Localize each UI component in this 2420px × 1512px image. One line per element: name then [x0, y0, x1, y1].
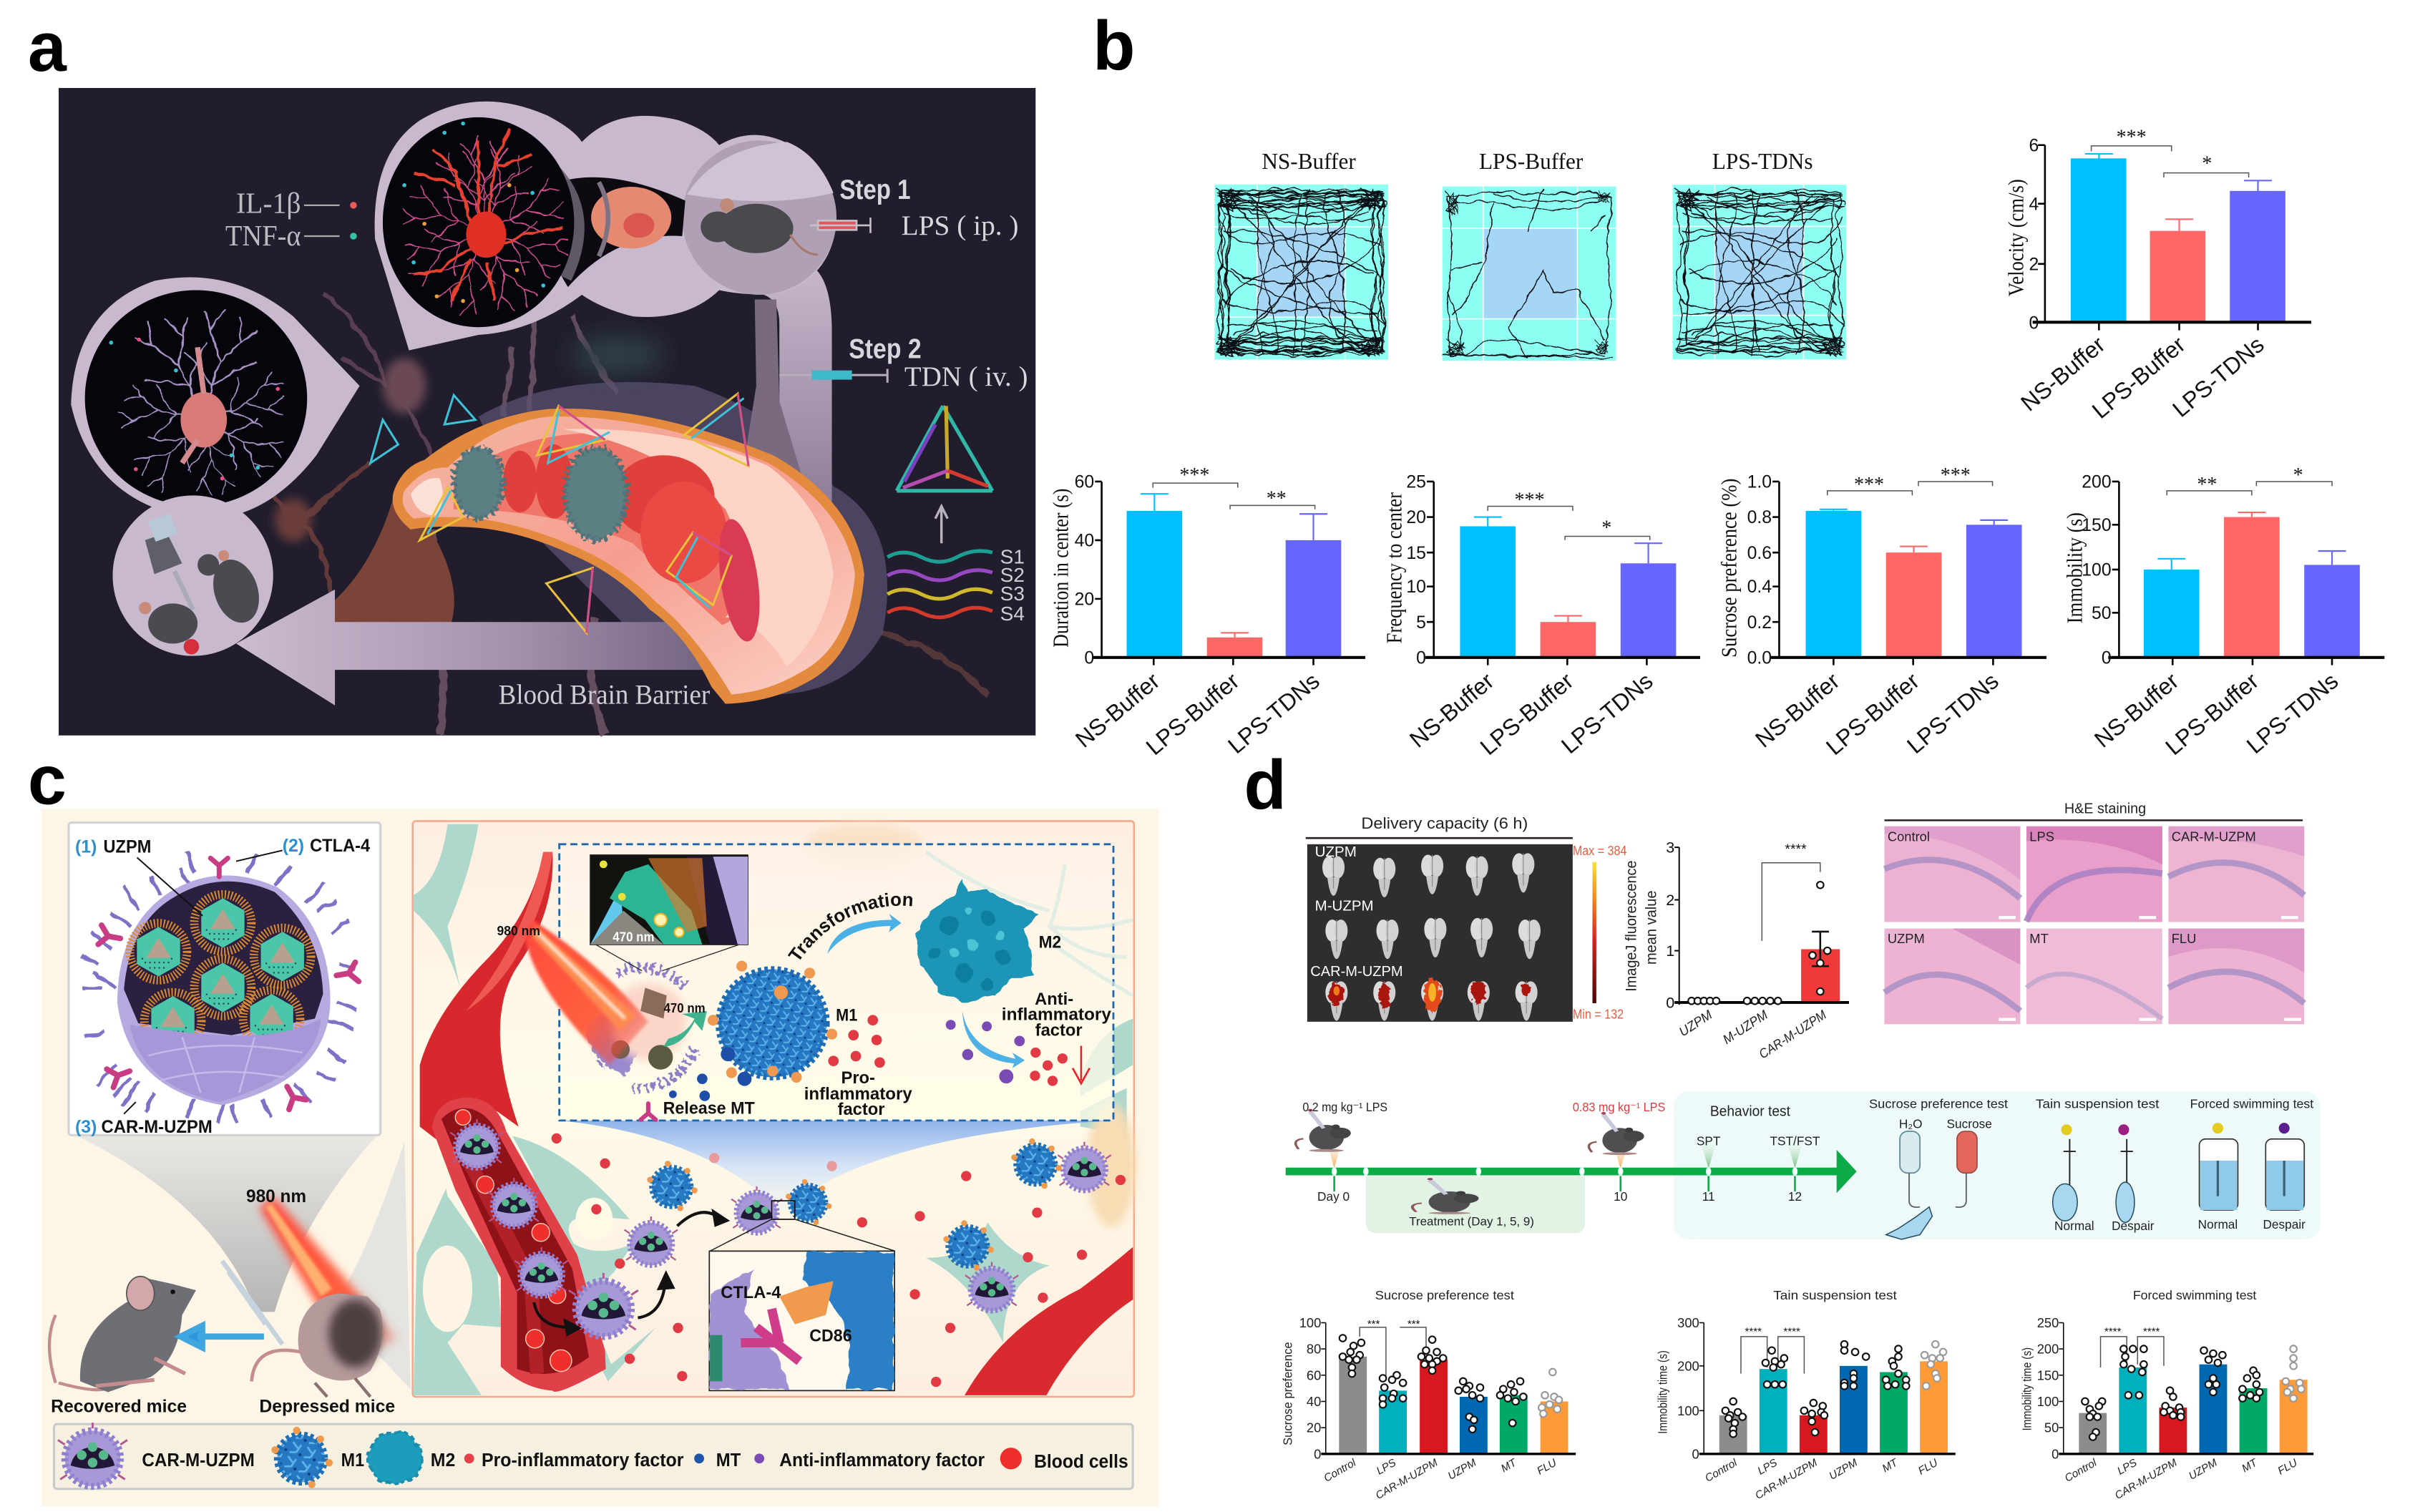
red factor dots: [552, 1133, 1126, 1387]
vessel stem: [301, 486, 454, 625]
chart: forced swimming test: FLU: [2275, 1457, 2300, 1478]
timeline and test illustrations: [1286, 1097, 2313, 1239]
H&E tile CAR-M-UZPM: [2168, 826, 2304, 922]
panel b: open field tracks: [1214, 149, 1846, 361]
timeline: 11: [1702, 1189, 1715, 1204]
chart: ImageJ fluorescence: UZPM: [1676, 1007, 1715, 1039]
chart: velocity: 6: [2029, 136, 2039, 155]
chart: duration in center: 60: [1075, 473, 1094, 492]
forced swimming illustration: [2190, 1097, 2313, 1231]
CAR particle in box: [583, 967, 707, 1120]
selection box: [771, 1201, 795, 1219]
treatment panel background: [1366, 1176, 1585, 1233]
strand labels: S1: [1000, 545, 1025, 567]
chart: ImageJ fluorescence: M-UZPM: [1720, 1007, 1771, 1047]
chart: sucrose preference test: UZPM: [1446, 1456, 1479, 1483]
chart: forced swimming test: MT: [2240, 1456, 2260, 1475]
teardrop top: [375, 102, 836, 351]
Pro-inflammatory label: factor: [838, 1101, 884, 1119]
Pro-inflammatory label: inflammatory: [804, 1086, 913, 1104]
chart: ImageJ fluorescence: 3: [1666, 839, 1674, 857]
chart: forced swimming test: 250: [2037, 1315, 2059, 1330]
big DNA tetrahedron: [897, 406, 992, 491]
chart: forced swimming test: UZPM: [2187, 1456, 2220, 1483]
chart: immobility: 150: [2082, 516, 2112, 535]
LPS dose 1: 0.2 mg kg⁻¹ LPS: [1302, 1100, 1387, 1114]
chart: velocity: *: [2202, 152, 2212, 175]
chart: sucrose preference: LPS-TDNs: [1902, 668, 2004, 759]
label 2: (2): [283, 837, 304, 856]
tail suspension illustration: Despair: [2112, 1219, 2155, 1233]
chart: frequency to center: 25: [1406, 473, 1426, 492]
chart: ImageJ fluorescence: ImageJ fluorescence: [1621, 860, 1639, 992]
chart: tail suspension test: Control: [1703, 1456, 1740, 1485]
chart: velocity: LPS-Buffer: [2087, 331, 2190, 424]
Anti-inflammatory label: [1002, 990, 1112, 1040]
membrane spikes: [80, 852, 358, 1123]
arena LPS-Buffer: [1443, 149, 1616, 361]
funnel right: [331, 1142, 411, 1389]
mouse circle: [112, 495, 273, 656]
panel label b: b: [1093, 6, 1135, 84]
blood cells in vessel: [455, 1110, 572, 1372]
chart: sucrose preference: NS-Buffer: [1750, 668, 1845, 753]
chart: sucrose preference test: Sucrose preference: [1280, 1342, 1294, 1445]
legend bar: [54, 1423, 1133, 1489]
label 3: (3): [75, 1118, 97, 1137]
chart: sucrose preference test: 0: [1314, 1446, 1321, 1461]
chart: sucrose preference: LPS-Buffer: [1821, 668, 1924, 760]
chart: sucrose preference: ***: [1854, 474, 1884, 496]
chart: velocity: ***: [2117, 127, 2147, 149]
CAR-M-UZPM label: CAR-M-UZPM: [101, 1118, 213, 1137]
chart: ImageJ fluorescence: mean value: [1641, 891, 1659, 965]
chart: sucrose preference test: MT: [1499, 1456, 1520, 1475]
arena NS-Buffer: NS-Buffer: [1262, 149, 1356, 174]
large panel background: [412, 820, 1141, 1398]
forced swimming illustration: Forced swimming test: [2190, 1097, 2313, 1111]
chart: immobility: NS-Buffer: [2089, 668, 2184, 753]
chart: duration in center: 20: [1075, 590, 1094, 610]
labels IL-1beta TNF-alpha: TNF-α: [225, 219, 301, 252]
chart: tail suspension test: 300: [1677, 1315, 1699, 1330]
chart: forced swimming test: LPS: [2115, 1457, 2139, 1478]
chart: duration in center: 0: [1084, 648, 1094, 668]
timeline: Day 0: [1317, 1189, 1350, 1204]
H&E tile MT: [2026, 929, 2162, 1024]
big arrow: [236, 590, 726, 706]
Pro-inflammatory label: [804, 1069, 913, 1119]
neuron circle left: [85, 290, 307, 506]
faded factor dots: [709, 1153, 837, 1171]
sucrose test illustration: Sucrose preference test: [1869, 1097, 2008, 1111]
step 1 label: Step 1: [839, 175, 911, 205]
chart: forced swimming test: [2019, 1288, 2313, 1502]
TDN label: TDN ( iv. ): [904, 361, 1028, 392]
H&E staining panel: [1885, 801, 2304, 1024]
chart: forced swimming test: Control: [2063, 1456, 2099, 1485]
chart: frequency to center: [1382, 473, 1700, 760]
legend bar: Pro-inflammatory factor: [482, 1450, 684, 1470]
chart: tail suspension test: 0: [1692, 1446, 1699, 1461]
chart: tail suspension test: FLU: [1916, 1457, 1940, 1478]
labels IL-1beta TNF-alpha: [225, 187, 357, 252]
Anti-inflammatory label: Anti-: [1035, 990, 1073, 1009]
strands S1-S4: [887, 551, 992, 618]
chart: forced swimming test: 0: [2051, 1446, 2059, 1461]
980 nm small: 980 nm: [497, 923, 540, 938]
H&E tile control: [1885, 826, 2020, 922]
chart: tail suspension test: MT: [1880, 1456, 1901, 1475]
legend bar: M1: [341, 1450, 364, 1470]
chart: frequency to center: Frequency to center: [1382, 492, 1406, 643]
legend bar: CAR-M-UZPM: [142, 1450, 255, 1470]
legend bar: Anti-inflammatory factor: [779, 1450, 985, 1470]
tail suspension illustration: Tain suspension test: [2036, 1097, 2160, 1111]
zoom lines CTLA: [710, 1219, 895, 1251]
chart: immobility: 50: [2092, 604, 2112, 623]
panel label d: d: [1244, 746, 1287, 824]
recovered mouse: [49, 1277, 196, 1392]
chart: sucrose preference: 0.4: [1747, 577, 1772, 597]
sucrose test illustration: [1869, 1097, 2008, 1239]
timeline: 12: [1788, 1189, 1802, 1204]
chart: sucrose preference test: 80: [1307, 1342, 1321, 1357]
chart: velocity: [2004, 127, 2311, 424]
chart: frequency to center: 10: [1406, 577, 1426, 597]
chart: tail suspension test: ****: [1783, 1326, 1800, 1338]
strand labels: S3: [1000, 582, 1025, 605]
chart: sucrose preference test: Sucrose preference test: [1375, 1288, 1514, 1302]
CTLA-4 label: CTLA-4: [310, 837, 370, 856]
mouse day 0: [1296, 1109, 1351, 1152]
chart: immobility: 0: [2102, 648, 2112, 668]
LPS label: LPS ( ip. ): [902, 210, 1019, 241]
chart: sucrose preference: 0.2: [1747, 613, 1772, 633]
delivery capacity imaging: CAR-M-UZPM: [1310, 963, 1403, 980]
delivery capacity imaging: Delivery capacity (6 h): [1361, 814, 1528, 832]
arrow heads: [563, 1209, 730, 1337]
H&E tile CAR-M-UZPM: CAR-M-UZPM: [2172, 829, 2256, 844]
chart: forced swimming test: 200: [2037, 1342, 2059, 1357]
forced swimming illustration: Despair: [2263, 1217, 2306, 1231]
chart: tail suspension test: UZPM: [1827, 1456, 1860, 1483]
blue arrow: [180, 1326, 264, 1347]
LPS dose 2: 0.83 mg kg⁻¹ LPS: [1573, 1100, 1665, 1114]
strand labels: S2: [1000, 564, 1025, 586]
pro-inflammatory dots: [828, 1015, 885, 1068]
red blood cells: [503, 444, 766, 644]
chart: ImageJ fluorescence: CAR-M-UZPM: [1756, 1007, 1829, 1061]
chart: duration in center: NS-Buffer: [1070, 668, 1165, 753]
faint astrocytes inside box: [926, 852, 1133, 995]
chart: frequency to center: LPS-TDNs: [1556, 668, 1658, 759]
chart: sucrose preference test: 60: [1307, 1367, 1321, 1382]
SPT label: SPT: [1697, 1133, 1721, 1148]
chart: frequency to center: NS-Buffer: [1405, 668, 1499, 753]
tetrahedra: [371, 394, 748, 633]
panel a: TDN mechanism illustration: [59, 88, 1035, 736]
mouse treatment: [1413, 1178, 1479, 1214]
legend bar: MT: [716, 1450, 741, 1470]
timeline: 10: [1614, 1189, 1627, 1204]
Anti-inflammatory label: inflammatory: [1002, 1006, 1112, 1025]
forced swimming illustration: Normal: [2198, 1217, 2238, 1231]
chart: sucrose preference: [1717, 464, 2046, 760]
Release MT label: Release MT: [663, 1100, 755, 1118]
blue curved arrow: [962, 1011, 1025, 1068]
chart: frequency to center: 20: [1406, 508, 1426, 527]
chart: immobility: *: [2293, 464, 2303, 487]
chart: frequency to center: LPS-Buffer: [1475, 668, 1579, 760]
H&E tile FLU: [2168, 929, 2304, 1024]
arena LPS-TDNs: LPS-TDNs: [1712, 149, 1813, 174]
chart: immobility: LPS-TDNs: [2242, 668, 2343, 759]
CTLA-4 CD86 inset: [709, 1251, 894, 1390]
chart: velocity: LPS-TDNs: [2167, 331, 2269, 422]
mouse step 1: [701, 198, 870, 255]
chart: frequency to center: 0: [1416, 648, 1426, 668]
H&E tile FLU: FLU: [2172, 931, 2196, 946]
left teardrop: [71, 278, 360, 519]
chart: duration in center: ***: [1179, 464, 1209, 487]
red vessel right: [965, 1247, 1133, 1395]
H&E tile UZPM: UZPM: [1888, 931, 1925, 946]
chart: tail suspension test: 100: [1677, 1403, 1699, 1418]
CAR particles: [450, 1119, 1111, 1337]
upper vessel: [420, 852, 552, 1142]
panel label c: c: [28, 741, 67, 819]
faint tan neuron top: [806, 824, 923, 867]
chart: frequency to center: ***: [1514, 489, 1544, 511]
timeline: [1286, 1138, 1857, 1204]
arena NS-Buffer: [1214, 149, 1388, 360]
chart: ImageJ fluorescence: 0: [1666, 993, 1674, 1011]
chart: immobility: 100: [2082, 561, 2112, 580]
delivery capacity imaging: UZPM: [1315, 844, 1357, 860]
lower vessel tube: [432, 1098, 606, 1392]
mouse day 10: [1589, 1112, 1644, 1155]
chart: velocity: Velocity (cm/s): [2004, 179, 2029, 296]
syringe step 2: [779, 369, 887, 383]
chart: forced swimming test: ****: [2104, 1326, 2122, 1338]
chart: forced swimming test: Immobility time (s): [2019, 1347, 2034, 1430]
chart: sucrose preference test: 100: [1299, 1315, 1321, 1330]
chart: frequency to center: 5: [1416, 613, 1426, 633]
chart: tail suspension test: Tain suspension test: [1773, 1288, 1897, 1302]
step 2 label: Step 2: [849, 333, 922, 364]
strand labels: [1000, 545, 1025, 625]
chart: forced swimming test: 50: [2044, 1420, 2059, 1435]
mini inset: [590, 855, 748, 945]
chart: sucrose preference test: ***: [1367, 1318, 1380, 1330]
chart: ImageJ fluorescence: 2: [1666, 891, 1674, 909]
up arrow: [935, 506, 947, 543]
UZPM label: UZPM: [104, 838, 151, 857]
zoom lines: [596, 945, 739, 971]
upper right lighter disc: [682, 140, 836, 295]
chart: forced swimming test: 150: [2037, 1367, 2059, 1382]
470 nm particle: 470 nm: [663, 1000, 706, 1015]
TST/FST label: TST/FST: [1770, 1133, 1820, 1148]
chart: forced swimming test: Forced swimming test: [2133, 1288, 2257, 1302]
inset particle: [69, 823, 381, 1135]
chart: sucrose preference: 0.0: [1747, 648, 1772, 668]
depressed mouse: [252, 1293, 383, 1397]
blood vessel cross-section: [393, 409, 864, 704]
black curved arrows: [534, 1212, 719, 1327]
chart: tail suspension test: [1655, 1288, 1956, 1502]
behavior test label: Behavior test: [1710, 1103, 1790, 1119]
delivery capacity imaging: Max = 384: [1573, 843, 1626, 858]
tail suspension illustration: [2036, 1097, 2160, 1233]
H&E tile control: Control: [1888, 829, 1930, 844]
chart: tail suspension test: LPS: [1756, 1457, 1780, 1478]
Pro-inflammatory label: Pro-: [841, 1069, 875, 1088]
CD86 inset label: CD86: [809, 1327, 852, 1345]
Transformation curved text: Transformation: [787, 893, 912, 960]
red down arrow: [1073, 1046, 1090, 1083]
dashed box: [560, 844, 1113, 1121]
chart: sucrose preference test: LPS: [1375, 1457, 1398, 1478]
label 1: (1): [75, 838, 97, 857]
chart: forced swimming test: ****: [2143, 1326, 2160, 1338]
chart: ImageJ fluorescence: 1: [1666, 942, 1674, 960]
M1 in box: [708, 961, 837, 1083]
chart: sucrose preference: Sucrose preference (%): [1717, 479, 1741, 658]
980 nm label: 980 nm: [246, 1187, 306, 1206]
Recovered mice label: Recovered mice: [51, 1398, 187, 1417]
H&E staining panel: H&E staining: [2064, 801, 2146, 817]
chart: velocity: NS-Buffer: [2016, 331, 2110, 416]
Blood Brain Barrier label: Blood Brain Barrier: [499, 680, 710, 711]
chart: sucrose preference: ***: [1941, 464, 1971, 487]
chart: velocity: 0: [2029, 313, 2039, 333]
chart: sucrose preference test: [1280, 1288, 1576, 1502]
Anti-inflammatory label: factor: [1035, 1021, 1083, 1040]
chart: immobility: Immobility (s): [2063, 512, 2087, 623]
vertical pipe: [753, 260, 832, 509]
chart: tail suspension test: ****: [1745, 1326, 1762, 1338]
neuron circle top: [383, 117, 575, 327]
chart: tail suspension test: Immobility time (s): [1655, 1350, 1669, 1434]
chart: sucrose preference: 0.8: [1747, 508, 1772, 527]
chart: duration in center: LPS-Buffer: [1141, 668, 1244, 760]
labels IL-1beta TNF-alpha: IL-1β: [236, 187, 301, 220]
delivery capacity imaging: M-UZPM: [1315, 898, 1374, 914]
chart: tail suspension test: CAR-M-UZPM: [1753, 1456, 1820, 1502]
funnel to dashed box: [559, 1121, 1114, 1211]
funnel left: [77, 1136, 376, 1312]
bottom charts group: [1280, 1288, 2313, 1502]
panel c: CAR-M-UZPM illustration: [42, 809, 1159, 1506]
behaviour panel background: [1674, 1091, 2321, 1239]
chart: forced swimming test: CAR-M-UZPM: [2113, 1456, 2180, 1502]
legend bar: M2: [431, 1450, 455, 1470]
chart: duration in center: LPS-TDNs: [1223, 668, 1324, 759]
astrocytes: [414, 824, 1133, 1395]
470 nm inset: 470 nm: [613, 930, 655, 945]
treatment label: Treatment (Day 1, 5, 9): [1409, 1216, 1534, 1229]
delivery capacity imaging: Min = 132: [1573, 1007, 1624, 1022]
laser 980 on mouse: [259, 1198, 398, 1358]
reduced factor dots: [1030, 1048, 1068, 1086]
M1 label: M1: [836, 1007, 857, 1025]
background neurons: [270, 263, 987, 735]
chart: immobility: [2063, 464, 2384, 760]
chart: immobility: **: [2197, 474, 2217, 496]
chart: ImageJ fluorescence: ****: [1785, 842, 1807, 857]
chart: sucrose preference: 0.6: [1747, 544, 1772, 563]
chart: duration in center: 40: [1075, 532, 1094, 551]
M2 in box: [915, 879, 1039, 1003]
M1 particles: [647, 1138, 1062, 1271]
transformation arrow: [827, 914, 902, 954]
chart: sucrose preference test: ***: [1407, 1318, 1420, 1330]
chart: duration in center: **: [1267, 487, 1287, 509]
H&E tile UZPM: [1885, 929, 2020, 1024]
chart: sucrose preference test: CAR-M-UZPM: [1374, 1456, 1440, 1502]
chart: sucrose preference test: FLU: [1535, 1457, 1558, 1478]
chart: sucrose preference test: 20: [1307, 1420, 1321, 1435]
H&E tile LPS: [2026, 826, 2162, 922]
Depressed mice label: Depressed mice: [259, 1398, 395, 1417]
chart: sucrose preference test: 40: [1307, 1394, 1321, 1409]
H&E tile LPS: LPS: [2029, 829, 2054, 844]
CTLA-4 inset label: CTLA-4: [721, 1284, 781, 1302]
tail suspension illustration: Normal: [2054, 1219, 2094, 1233]
sucrose test illustration: H₂O: [1899, 1117, 1923, 1131]
H&E tile MT: MT: [2029, 931, 2049, 946]
M2 label: M2: [1039, 933, 1061, 952]
chart: immobility: 200: [2082, 473, 2112, 492]
delivery capacity imaging: [1306, 814, 1626, 1022]
chart: ImageJ fluorescence: [1621, 839, 1849, 1061]
sucrose test illustration: Sucrose: [1947, 1117, 1992, 1131]
chart: forced swimming test: 100: [2037, 1394, 2059, 1409]
panel label a: a: [28, 8, 67, 86]
syringe: [223, 1261, 283, 1345]
chart: velocity: 4: [2029, 195, 2039, 214]
chart: duration in center: Duration in center (s): [1049, 489, 1073, 648]
anti-inflammatory drops: [946, 1020, 1025, 1083]
arena LPS-Buffer: LPS-Buffer: [1479, 149, 1584, 174]
chart: frequency to center: 15: [1406, 544, 1426, 563]
brain hole: [547, 177, 685, 287]
chart: immobility: LPS-Buffer: [2160, 668, 2263, 760]
laser 980 beam: [525, 920, 648, 1065]
strand labels: S4: [1000, 603, 1025, 625]
MT drops: [669, 1047, 751, 1101]
membrane shapes behind vessel: [479, 382, 887, 695]
chart: velocity: 2: [2029, 255, 2039, 274]
arena LPS-TDNs: [1673, 149, 1846, 359]
green nanoparticles: [454, 447, 627, 540]
chart: duration in center: [1049, 464, 1365, 760]
chart: sucrose preference test: Control: [1322, 1456, 1358, 1485]
chart: frequency to center: *: [1601, 517, 1611, 539]
chart: tail suspension test: 200: [1677, 1358, 1699, 1373]
chart: sucrose preference: 1.0: [1747, 473, 1772, 492]
legend bar: Blood cells: [1034, 1452, 1128, 1472]
